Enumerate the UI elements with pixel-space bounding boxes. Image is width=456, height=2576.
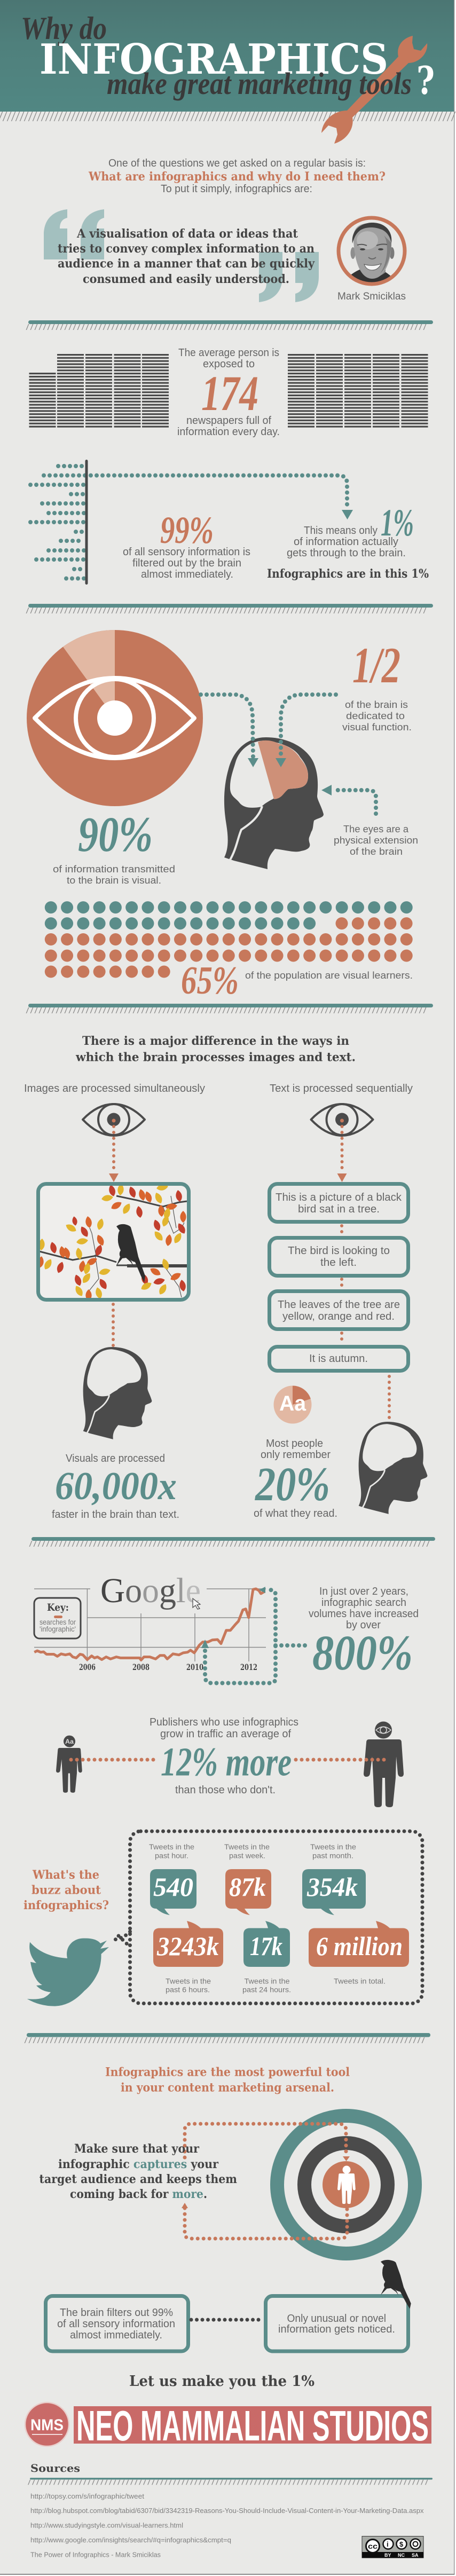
- panel: sources: Sources: [30, 2462, 80, 2475]
- logo badge: [25, 2402, 69, 2446]
- 1 percent statistic: gets through to the brain.: [287, 547, 406, 559]
- one half statistic: of the brain is: [345, 699, 408, 710]
- heading: most powerful tool: [105, 2065, 350, 2095]
- tweets past hour: Tweets in the: [149, 1842, 194, 1851]
- heading: images and text: which the brain processes images and text.: [75, 1051, 356, 1065]
- panel: twitter buzz: [23, 1831, 422, 2006]
- logo badge: NMS: [30, 2416, 64, 2434]
- dotted speech outline: [113, 1831, 422, 2003]
- eyes caption: physical extension: [334, 835, 418, 846]
- 65 percent statistic: [181, 959, 413, 1003]
- tweets past week: past week.: [229, 1852, 265, 1860]
- right box: [266, 2296, 408, 2351]
- one half statistic: 1/2: [352, 637, 400, 694]
- eyes caption: [334, 824, 418, 857]
- text box three: [269, 1291, 408, 1329]
- icon: closing quote marks: [259, 252, 319, 302]
- tweets past six hours: 3243k: [156, 1931, 219, 1961]
- tweets past hour: [149, 1842, 196, 1915]
- 1 percent statistic: This means only: [304, 525, 378, 537]
- 20 percent statistic: Most people: [266, 1438, 323, 1450]
- licence badge: cc: [368, 2542, 378, 2550]
- dotted connectors: [71, 1758, 386, 1762]
- tweets in total: Tweets in total.: [334, 1976, 386, 1985]
- source links: http://www.studyingstyle.com/visual-learners.html: [30, 2521, 183, 2530]
- tweets in total: [309, 1921, 409, 1985]
- 800 percent statistic: by over: [346, 1619, 381, 1631]
- source links: http://topsy.com/s/infographic/tweet: [30, 2492, 144, 2500]
- chart key: 'infographic': [40, 1625, 76, 1633]
- tweets past 24 hours: 17k: [250, 1931, 282, 1961]
- target text: coming back for more.: [70, 2187, 207, 2201]
- icon: twitter bird: [27, 1938, 109, 2006]
- title: make great marketing tools: [107, 66, 412, 101]
- buzz heading: infographics?: [23, 1898, 109, 1912]
- heading: images and text: There is a major difference in the ways in: [82, 1034, 349, 1048]
- buzz heading: What's the: [32, 1868, 99, 1882]
- arrow: text to brain: [384, 1376, 394, 1439]
- icon: head: [83, 1347, 152, 1439]
- tweets past 24 hours: Tweets in the: [245, 1976, 290, 1985]
- text box four: It is autumn.: [309, 1353, 368, 1365]
- chart: search volume line chart: [34, 1589, 266, 1672]
- icon: person in target: [337, 2173, 356, 2204]
- chart: search volume line chart: 2006: [79, 1662, 96, 1672]
- newspaper statistic: [177, 347, 280, 438]
- panel: text processed: [254, 1083, 427, 1519]
- 1 percent statistic: 1%: [381, 501, 414, 544]
- 90 percent statistic: of information transmitted: [53, 864, 175, 875]
- tweets past week: Tweets in the: [224, 1842, 270, 1851]
- newspaper statistic: newspapers full of: [186, 415, 271, 427]
- panel: text processed: Text is processed sequentially: [270, 1083, 413, 1094]
- Google logo: Google: [100, 1571, 201, 1610]
- 99 percent statistic: of all sensory information is: [123, 546, 250, 558]
- one half statistic: visual function.: [342, 722, 412, 732]
- newspaper statistic: The average person is: [178, 347, 279, 359]
- 60,000x statistic: faster in the brain than text.: [52, 1509, 179, 1521]
- 20 percent statistic: [254, 1438, 337, 1519]
- right box: information gets noticed.: [278, 2323, 395, 2335]
- icon: opening quote marks: [44, 209, 104, 259]
- 12 percent statistic: [150, 1716, 298, 1796]
- quote attribution: Mark Smiciklas: [337, 291, 406, 302]
- icon: small text person: [56, 1736, 82, 1793]
- tweets past month: past month.: [312, 1852, 353, 1860]
- quote text: consumed and easily understood.: [83, 272, 289, 286]
- arrow: capture loop: [185, 2124, 350, 2161]
- one half statistic: [342, 637, 412, 732]
- title: Why do: [21, 11, 107, 46]
- tweets past week: 87k: [229, 1872, 266, 1902]
- text box three: yellow, orange and red.: [282, 1311, 395, 1322]
- title: ?: [416, 58, 435, 103]
- chart: 20 percent pie with Aa: [273, 1386, 312, 1423]
- intro text: [88, 157, 386, 195]
- arrow: one percent path: [44, 475, 353, 519]
- tweets past month: Tweets in the: [310, 1842, 356, 1851]
- chart: dotted information rows: [30, 466, 84, 579]
- target text: [40, 2142, 237, 2201]
- one half statistic: dedicated to: [346, 711, 405, 721]
- 800 percent statistic: [309, 1586, 419, 1681]
- panel: target audience: [40, 2116, 415, 2254]
- quote text: audience in a manner that can be quickly: [58, 257, 315, 271]
- tweets past 24 hours: past 24 hours.: [242, 1985, 291, 1994]
- arrow: eye to text: [337, 1126, 347, 1182]
- licence badge: $: [399, 2540, 404, 2548]
- chart: 90 percent pie with eye: [27, 630, 203, 806]
- text box one: [269, 1184, 408, 1222]
- 65 percent statistic: of the population are visual learners.: [245, 970, 413, 981]
- newspaper statistic: exposed to: [203, 358, 255, 370]
- arrow: half of brain: [276, 695, 336, 767]
- 99 percent statistic: [123, 509, 250, 580]
- arrow: eyes extension: [321, 785, 376, 814]
- panel: brain filter boxes: [46, 2260, 411, 2351]
- icon: large visual person: [364, 1721, 404, 1807]
- text box two: the left.: [320, 1257, 357, 1269]
- newspaper statistic: 174: [201, 366, 258, 421]
- panel: sources: [29, 2462, 433, 2559]
- source links: http://www.google.com/insights/search/#q=infographics&cmpt=q: [30, 2536, 231, 2544]
- icon: head: [359, 1422, 427, 1514]
- panel: images processed: Images are processed simultaneously: [24, 1083, 205, 1094]
- panel: images processed: [24, 1083, 205, 1521]
- 99 percent statistic: filtered out by the brain: [132, 557, 241, 569]
- icon: eye: [83, 1104, 145, 1136]
- chart: 20 percent pie with Aa: Aa: [279, 1392, 306, 1415]
- 20 percent statistic: 20%: [254, 1458, 330, 1511]
- text box two: The bird is looking to: [288, 1245, 390, 1257]
- left box: The brain filters out 99%: [60, 2307, 173, 2319]
- 90 percent statistic: [53, 807, 175, 886]
- target text: target audience and keeps them: [40, 2172, 237, 2186]
- chart key: [34, 1598, 81, 1638]
- icon: eye: [311, 1104, 373, 1136]
- 60,000x statistic: Visuals are processed: [66, 1453, 165, 1464]
- chart: search volume line chart: 2012: [240, 1662, 257, 1672]
- logo: Neo Mammalian Studios: [25, 2402, 431, 2449]
- 800 percent statistic: volumes have increased: [309, 1608, 419, 1620]
- heading: most powerful tool: Infographics are the most powerful tool: [105, 2065, 350, 2079]
- title: INFOGRAPHICS: [40, 35, 388, 84]
- text box one: bird sat in a tree.: [298, 1203, 380, 1215]
- chart key: searches for: [40, 1618, 76, 1626]
- picture: bird on branch: [37, 1184, 188, 1301]
- source links: The Power of Infographics - Mark Smiciklas: [30, 2551, 161, 2559]
- call to action: Let us make you the 1%: [129, 2373, 315, 2390]
- tweets past hour: past hour.: [155, 1852, 188, 1860]
- chart: search volume line chart: 2010: [186, 1662, 203, 1672]
- buzz heading: [23, 1868, 109, 1912]
- 1 percent statistic: [267, 501, 429, 581]
- panel: sensory filter: [30, 460, 429, 585]
- arrow: eye to picture: [109, 1126, 119, 1182]
- 20 percent statistic: of what they read.: [254, 1508, 337, 1519]
- 12 percent statistic: 12% more: [161, 1739, 292, 1784]
- 800 percent statistic: In just over 2 years,: [319, 1586, 408, 1597]
- quote text: A visualisation of data or ideas that: [76, 227, 298, 241]
- 99 percent statistic: 99%: [160, 509, 214, 552]
- licence badge: NC: [398, 2553, 405, 2558]
- portrait of Mark Smiciklas: [339, 218, 405, 288]
- text box three: The leaves of the tree are: [278, 1299, 400, 1311]
- 12 percent statistic: than those who don't.: [175, 1784, 276, 1796]
- icon: perched bird: [381, 2260, 411, 2309]
- icon: cursor: [193, 1598, 200, 1609]
- arrow: picture to brain: [108, 1304, 117, 1366]
- tweets past six hours: Tweets in the: [166, 1976, 211, 1985]
- chart: search volume line chart: 2008: [132, 1662, 150, 1672]
- 20 percent statistic: only remember: [261, 1449, 331, 1461]
- source links: http://blog.hubspot.com/blog/tabid/6307/bid/3342319-Reasons-You-Should-Include-Visual-Content-in-Your-Marketing-Data.aspx: [30, 2507, 424, 2515]
- tweets past six hours: past 6 hours.: [166, 1985, 210, 1994]
- header banner: [0, 0, 454, 144]
- 90 percent statistic: 90%: [78, 807, 153, 862]
- licence badge: [362, 2536, 423, 2558]
- panel: visual brain: [27, 630, 418, 1003]
- licence badge: SA: [412, 2553, 419, 2558]
- 1 percent statistic: of information actually: [294, 536, 398, 548]
- icon: small text person: Aa: [65, 1738, 74, 1745]
- tweets past week: [224, 1842, 271, 1915]
- intro text: One of the questions we get asked on a regular basis is:: [108, 157, 366, 169]
- panel: quote: [44, 209, 406, 302]
- chart key: Key:: [47, 1602, 69, 1613]
- right box: Only unusual or novel: [287, 2313, 386, 2325]
- quote text: tries to convey complex information to an: [58, 242, 315, 256]
- intro text: What are infographics and why do I need them?: [88, 170, 386, 184]
- icon: head with brain: [224, 737, 324, 869]
- eyes caption: The eyes are a: [343, 824, 409, 834]
- tweets past six hours: [153, 1921, 223, 1994]
- target text: infographic captures your: [58, 2157, 218, 2171]
- tweets past hour: 540: [153, 1872, 193, 1902]
- 99 percent statistic: almost immediately.: [141, 569, 233, 580]
- 60,000x statistic: 60,000x: [55, 1464, 177, 1508]
- text box one: This is a picture of a black: [276, 1192, 402, 1203]
- quote text: [58, 227, 315, 286]
- 800 percent statistic: 800%: [312, 1626, 413, 1681]
- panel: newspapers: [29, 347, 428, 438]
- 1 percent statistic: Infographics are in this 1%: [267, 567, 429, 581]
- tweets past month: [302, 1842, 366, 1915]
- text box two: [269, 1238, 408, 1276]
- arrow: return loop: [182, 2203, 347, 2239]
- chart: visual learners dot grid: [51, 908, 411, 972]
- licence badge: i: [387, 2540, 389, 2548]
- tweets in total: 6 million: [316, 1931, 403, 1961]
- 65 percent statistic: 65%: [181, 959, 239, 1003]
- 800 percent statistic: infographic search: [321, 1597, 406, 1609]
- panel: publishers traffic: [56, 1716, 404, 1807]
- 90 percent statistic: to the brain is visual.: [67, 875, 161, 886]
- 12 percent statistic: Publishers who use infographics: [150, 1716, 298, 1728]
- arrow: growth bracket: [201, 1587, 306, 1683]
- newspaper statistic: information every day.: [177, 426, 280, 438]
- heading: images and text: [75, 1034, 356, 1065]
- chart: right newspaper stacks: [288, 354, 428, 429]
- arrow: eye to brain: [201, 695, 258, 767]
- target text: Make sure that your: [74, 2142, 199, 2156]
- chart: left newspaper stacks: [29, 354, 169, 429]
- chart: target rings: [277, 2116, 415, 2254]
- source links: [30, 2492, 424, 2559]
- intro text: To put it simply, infographics are:: [161, 183, 312, 195]
- tweets past 24 hours: [242, 1921, 291, 1994]
- 12 percent statistic: grow in traffic an average of: [160, 1728, 291, 1740]
- buzz heading: buzz about: [32, 1884, 101, 1897]
- tweets past month: 354k: [306, 1872, 358, 1902]
- eyes caption: of the brain: [350, 846, 403, 857]
- left box: almost immediately.: [70, 2329, 162, 2341]
- licence badge: BY: [384, 2553, 391, 2558]
- title: [21, 11, 435, 103]
- left box: [46, 2296, 188, 2351]
- heading: most powerful tool: in your content marketing arsenal.: [121, 2081, 334, 2095]
- left box: of all sensory information: [57, 2318, 175, 2330]
- panel: google trends: [34, 1571, 419, 1683]
- text box four: [269, 1346, 408, 1371]
- 60,000x statistic: [52, 1453, 179, 1521]
- icon: wrench: [321, 36, 427, 144]
